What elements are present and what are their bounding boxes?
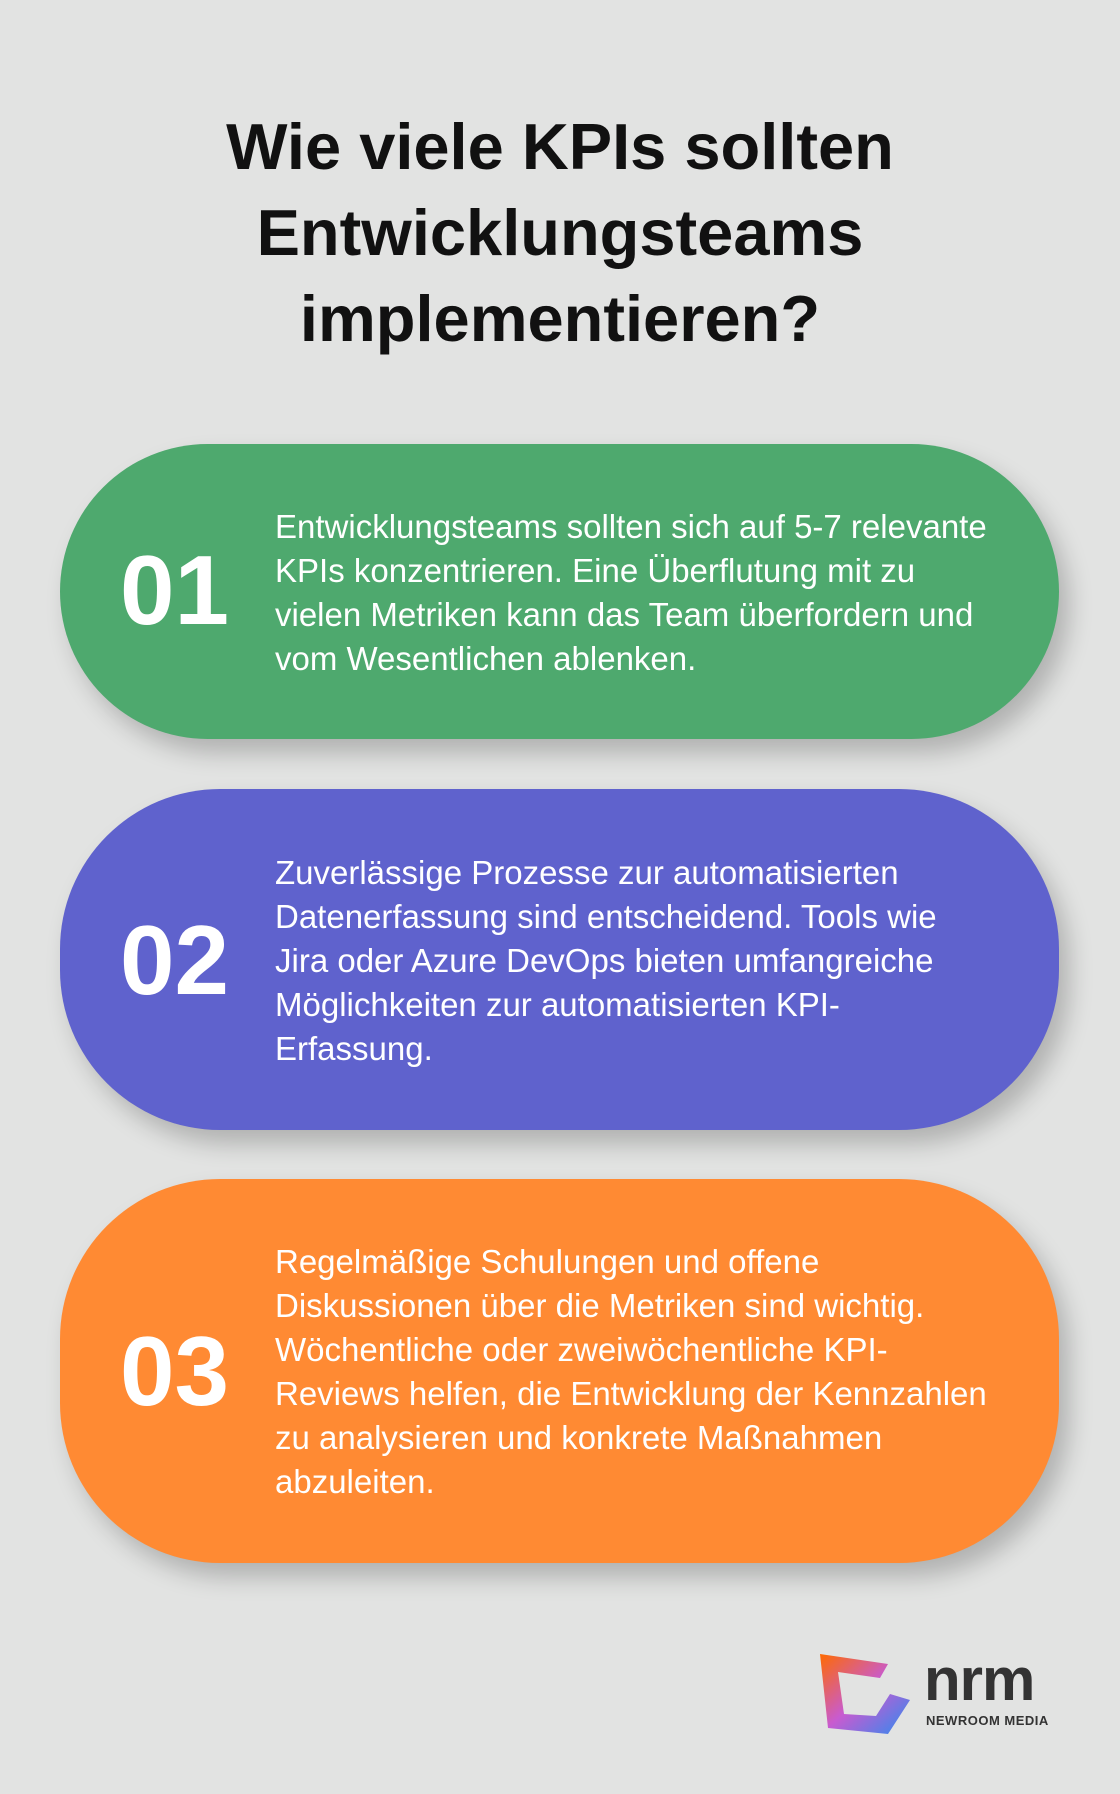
text 03 — [275, 1243, 987, 1500]
text 02: Datenerfassung sind entscheidend. Tools wie — [275, 898, 937, 935]
number 02: 02 — [120, 905, 229, 1015]
text 01: KPIs konzentrieren. Eine Überflutung mit zu — [275, 552, 915, 589]
number 01: 01 — [120, 535, 229, 645]
text 01: vom Wesentlichen ablenken. — [275, 640, 696, 677]
logo text: nrm — [924, 1646, 1034, 1713]
title: Entwicklungsteams — [257, 196, 863, 269]
text 03: abzuleiten. — [275, 1463, 435, 1500]
text 01: Entwicklungsteams sollten sich auf 5-7 relevante — [275, 508, 987, 545]
title: implementieren? — [300, 282, 820, 355]
text 01: vielen Metriken kann das Team überfordern und — [275, 596, 973, 633]
text 01 — [275, 508, 987, 677]
text 02 — [275, 854, 937, 1067]
icon: logo mark — [820, 1654, 910, 1734]
panel: 01 — [60, 444, 1059, 739]
text 03: Reviews helfen, die Entwicklung der Kennzahlen — [275, 1375, 987, 1412]
logo — [820, 1646, 1049, 1734]
number 03: 03 — [120, 1316, 229, 1426]
text 03: zu analysieren und konkrete Maßnahmen — [275, 1419, 882, 1456]
text 03: Regelmäßige Schulungen und offene — [275, 1243, 819, 1280]
text 02: Möglichkeiten zur automatisierten KPI- — [275, 986, 840, 1023]
panel: 03 — [60, 1179, 1059, 1563]
panel: 02 — [60, 789, 1059, 1130]
text 03: Wöchentliche oder zweiwöchentliche KPI- — [275, 1331, 888, 1368]
text 02: Jira oder Azure DevOps bieten umfangreiche — [275, 942, 934, 979]
logo: NEWROOM MEDIA — [926, 1713, 1049, 1728]
text 03: Diskussionen über die Metriken sind wichtig. — [275, 1287, 924, 1324]
text 02: Zuverlässige Prozesse zur automatisierten — [275, 854, 899, 891]
text 02: Erfassung. — [275, 1030, 433, 1067]
title — [226, 110, 894, 355]
title: Wie viele KPIs sollten — [226, 110, 894, 183]
